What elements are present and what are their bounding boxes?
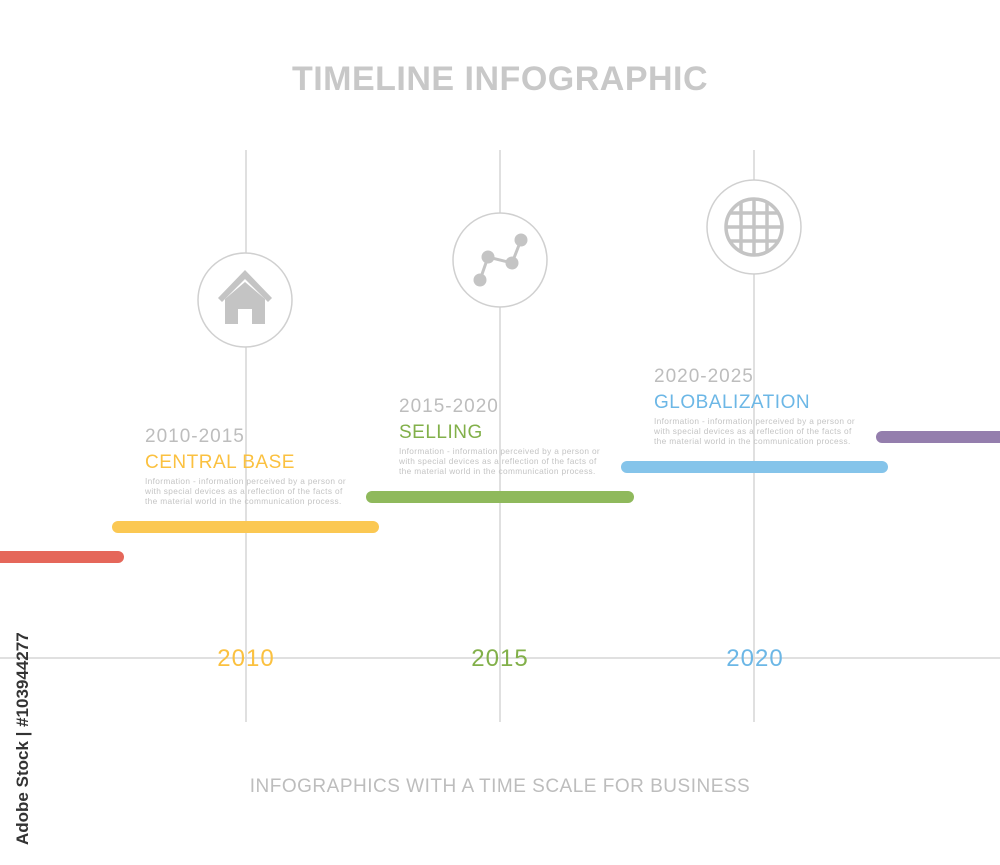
text block: 2015-2020: with special devices as a reflection of the facts of <box>398 456 597 466</box>
vertical guide lines <box>246 150 754 722</box>
text block: 2010-2015: CENTRAL BASE <box>145 452 295 473</box>
text block: 2010-2015: Information - information perceived by a person or <box>145 476 346 486</box>
bars <box>0 431 1000 563</box>
text block: 2020-2025: Information - information perceived by a person or <box>654 416 855 426</box>
text block: 2020-2025: the material world in the communication process. <box>654 436 851 446</box>
year labels <box>217 645 784 672</box>
icon: chart nodes <box>453 213 547 307</box>
icon: house <box>198 253 292 347</box>
text block: 2015-2020: SELLING <box>399 422 483 443</box>
text block: 2010-2015: with special devices as a reflection of the facts of <box>144 486 343 496</box>
text block: 2020-2025: 2020-2025 <box>654 366 754 387</box>
text block: 2010-2015 <box>144 426 346 506</box>
text block: 2020-2025: with special devices as a reflection of the facts of <box>653 426 852 436</box>
text block: 2010-2015: the material world in the communication process. <box>145 496 342 506</box>
text block: 2020-2025 <box>653 366 855 446</box>
year labels: 2010 <box>217 645 275 672</box>
text block: 2015-2020 <box>398 396 600 476</box>
text block: 2020-2025: GLOBALIZATION <box>654 392 810 413</box>
year labels: 2015 <box>471 645 529 672</box>
stock id: Adobe Stock | #103944277 <box>13 632 32 845</box>
year labels: 2020 <box>726 645 784 672</box>
text block: 2015-2020: Information - information perceived by a person or <box>399 446 600 456</box>
text block: 2015-2020: the material world in the communication process. <box>399 466 596 476</box>
text block: 2010-2015: 2010-2015 <box>145 426 245 447</box>
text block: 2015-2020: 2015-2020 <box>399 396 499 417</box>
subtitle: INFOGRAPHICS WITH A TIME SCALE FOR BUSINESS <box>250 776 750 797</box>
title: TIMELINE INFOGRAPHIC <box>292 60 708 98</box>
icon: globe <box>707 180 801 274</box>
axis line <box>0 657 1000 659</box>
